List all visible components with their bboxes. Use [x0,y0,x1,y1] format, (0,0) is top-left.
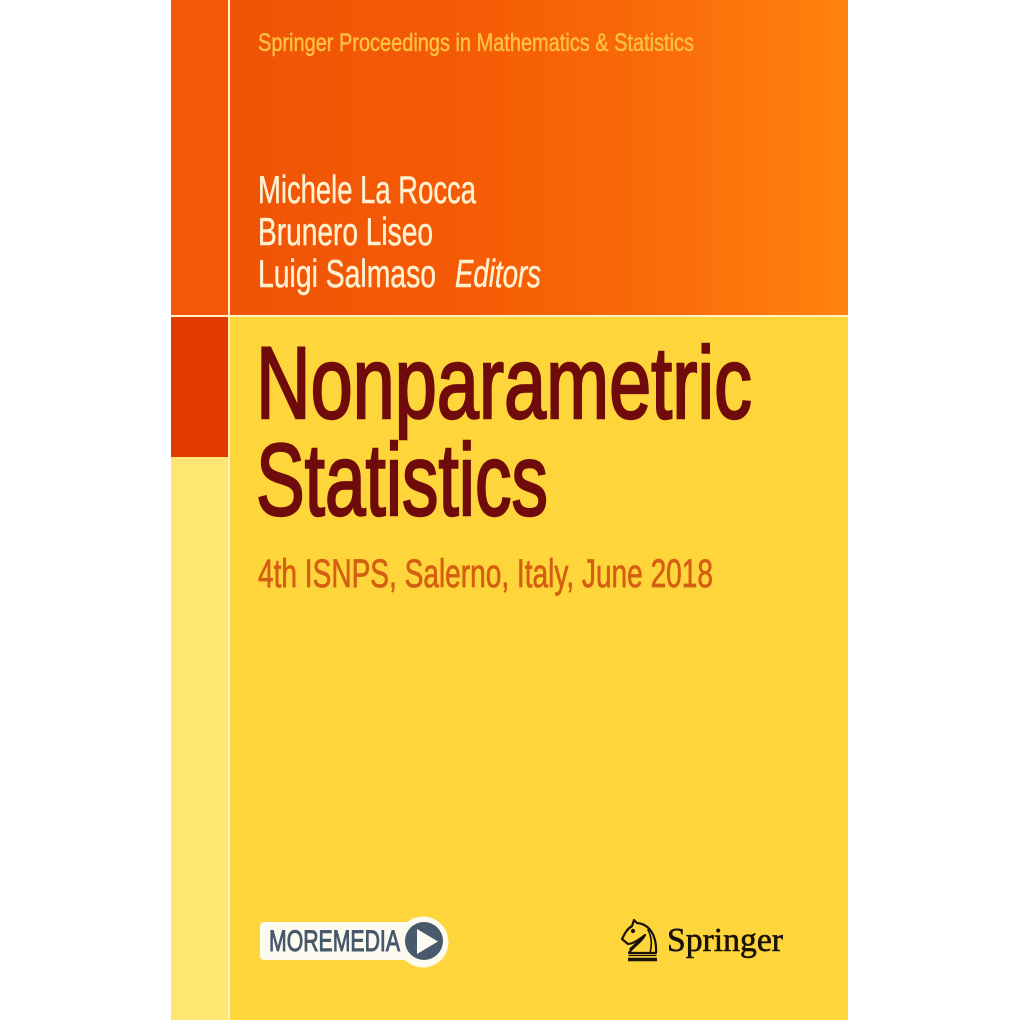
panel: pale yellow left strip [171,457,228,1020]
label: Editors: Editors [455,253,541,296]
Springer logo [622,920,784,960]
panel: orange top band [230,0,848,315]
panel: cover background [171,0,848,1020]
MoreMedia badge [260,916,448,968]
editor: Luigi Salmaso: Luigi Salmaso [258,253,436,296]
panel: orange left corner block [171,0,228,315]
main title [256,326,752,537]
editor: Brunero Liseo: Brunero Liseo [258,211,433,254]
icon: chess knight [622,920,657,960]
badge: label: MOREMEDIA [269,925,400,958]
icon: play button [405,922,443,960]
wordmark: Springer [667,922,784,959]
title line: Statistics: Statistics [256,423,548,537]
editor: Michele La Rocca: Michele La Rocca [258,169,476,212]
horizontal divider [171,315,848,317]
vertical divider [228,0,230,1020]
series title: Springer Proceedings in Mathematics & Statistics [258,29,694,57]
editors [258,169,541,296]
badge: white pill [260,916,448,968]
panel: red left block [171,317,228,457]
title line: Nonparametric: Nonparametric [256,326,752,440]
subtitle: 4th ISNPS, Salerno, Italy, June 2018 [258,552,713,596]
